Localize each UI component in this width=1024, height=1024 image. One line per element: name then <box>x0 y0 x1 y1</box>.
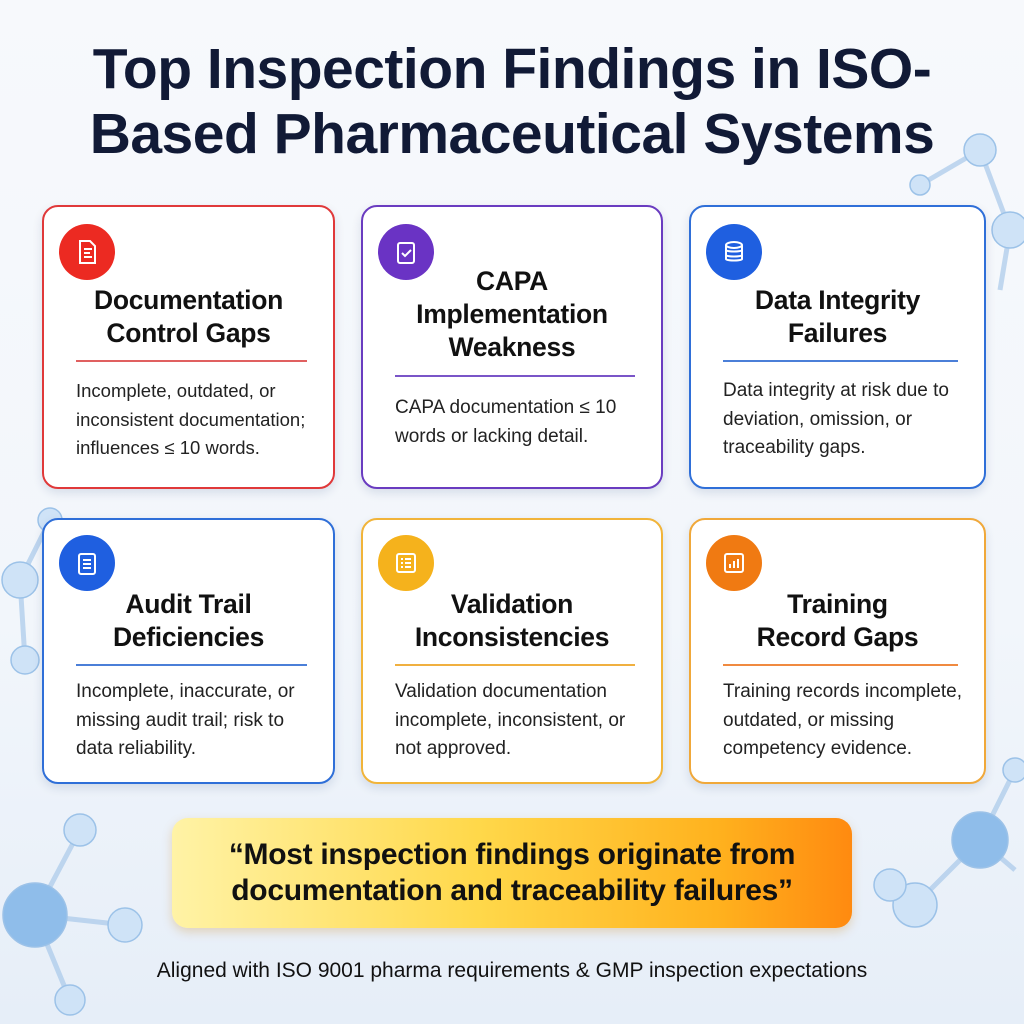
panel: data integrity <box>689 205 986 489</box>
text: CAPA documentation ≤ 10 words or lacking detail. <box>395 397 616 446</box>
panel: training <box>689 518 986 784</box>
heading <box>416 266 608 362</box>
panel: documentation control gaps <box>42 205 335 489</box>
heading <box>415 589 609 652</box>
heading <box>757 589 918 652</box>
title <box>90 37 934 166</box>
heading: Training <box>787 589 888 619</box>
heading: Validation <box>451 589 573 619</box>
heading: Audit Trail <box>125 589 252 619</box>
title: Based Pharmaceutical Systems <box>90 102 934 166</box>
panel: audit trail <box>42 518 335 784</box>
heading <box>113 589 264 652</box>
panel: CAPA <box>361 205 663 489</box>
heading: Weakness <box>449 332 575 362</box>
heading <box>755 285 920 348</box>
heading: Failures <box>788 318 887 348</box>
heading <box>94 285 283 348</box>
callout: quote banner: “Most inspection findings originate from <box>229 838 795 871</box>
text: Incomplete, outdated, or inconsistent documentation; influences ≤ 10 words. <box>76 380 305 458</box>
text: Incomplete, inaccurate, or missing audit trail; risk to data reliability. <box>76 681 295 759</box>
heading: Data Integrity <box>755 285 920 315</box>
text: Training records incomplete, outdated, or missing competency evidence. <box>723 681 962 759</box>
panel: validation <box>361 518 663 784</box>
heading: CAPA <box>476 266 548 296</box>
heading: Deficiencies <box>113 622 264 652</box>
footer: Aligned with ISO 9001 pharma requirements & GMP inspection expectations <box>157 959 867 982</box>
heading: Record Gaps <box>757 622 918 652</box>
text: Data integrity at risk due to deviation, omission, or traceability gaps. <box>723 380 949 458</box>
icon: document <box>59 224 115 280</box>
icon: checklist <box>59 535 115 591</box>
icon: list <box>378 535 434 591</box>
callout: quote banner: documentation and traceability failures” <box>231 874 793 907</box>
heading: Inconsistencies <box>415 622 609 652</box>
text: Validation documentation incomplete, inconsistent, or not approved. <box>395 681 625 759</box>
icon: clipboard check <box>378 224 434 280</box>
title: Top Inspection Findings in ISO- <box>93 37 931 101</box>
heading: Documentation <box>94 285 283 315</box>
icon: chart <box>706 535 762 591</box>
heading: Control Gaps <box>106 318 271 348</box>
callout: quote banner <box>172 818 852 928</box>
heading: Implementation <box>416 299 608 329</box>
icon: database <box>706 224 762 280</box>
